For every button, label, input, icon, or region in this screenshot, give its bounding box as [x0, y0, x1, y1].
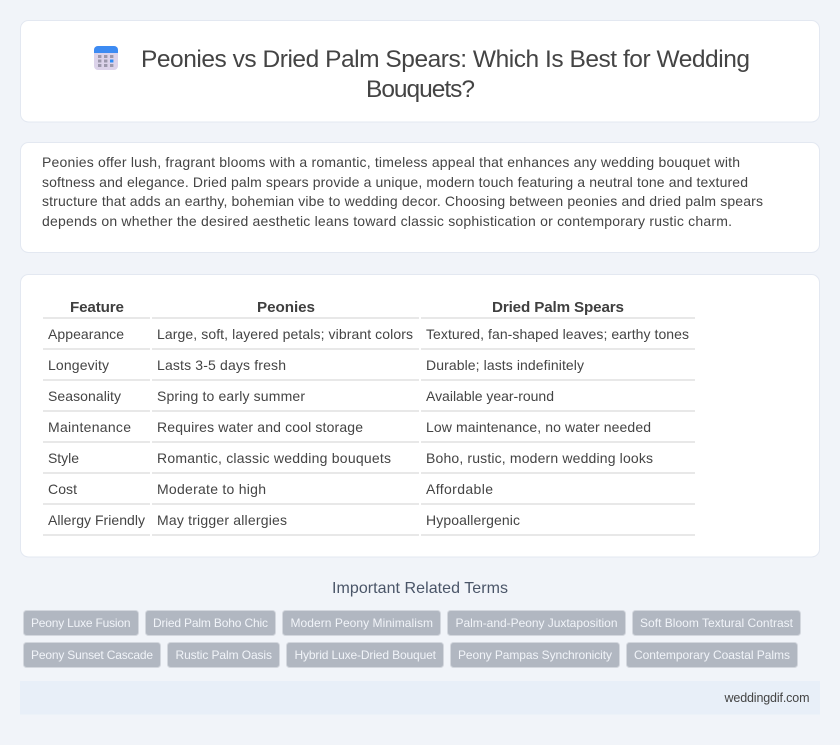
panel: title header [20, 20, 820, 122]
row: maintenance: Low maintenance, no water needed [426, 419, 651, 435]
row: style: Style [48, 450, 79, 466]
row: maintenance: Requires water and cool storage [157, 419, 363, 435]
row: appearance: Appearance [48, 326, 124, 342]
title: Peonies vs Dried Palm Spears: Which Is Best for Wedding [141, 46, 750, 73]
row: allergy friendly: Allergy Friendly [48, 512, 145, 528]
chip: Rustic Palm Oasis: Rustic Palm Oasis [176, 648, 272, 662]
row: allergy friendly: Hypoallergenic [426, 512, 520, 528]
chip: Modern Peony Minimalism: Modern Peony Minimalism [290, 616, 433, 630]
table header row [70, 299, 624, 316]
row: allergy friendly [48, 512, 520, 528]
chip: Soft Bloom Textural Contrast [632, 610, 800, 636]
chip: Peony Sunset Cascade: Peony Sunset Cascade [31, 648, 153, 662]
chip: Contemporary Coastal Palms: Contemporary Coastal Palms [634, 648, 790, 662]
chip: Modern Peony Minimalism [282, 610, 440, 636]
row: seasonality [48, 388, 554, 404]
intro paragraph: Peonies offer lush, fragrant blooms with a romantic, timeless appeal that enhances any wedding bouquet with [42, 154, 740, 170]
intro paragraph: softness and elegance. Dried palm spears provide a unique, modern touch featuring a neutral tone and textured [42, 174, 748, 190]
intro paragraph: structure that adds an earthy, bohemian vibe to wedding decor. Choosing between peonies and dried palm spears [42, 193, 763, 209]
chip: Palm-and-Peony Juxtaposition: Palm-and-Peony Juxtaposition [456, 616, 618, 630]
title: Bouquets? [366, 76, 475, 103]
intro paragraph: depends on whether the desired aesthetic leans toward classic sophistication or contemporary rustic charm. [42, 213, 732, 229]
chip: Peony Luxe Fusion [24, 610, 138, 636]
chip: Rustic Palm Oasis [168, 642, 280, 668]
row: cost [48, 481, 493, 497]
title [141, 46, 750, 103]
chip: Contemporary Coastal Palms [626, 642, 798, 668]
row: longevity [48, 357, 584, 373]
row: style: Boho, rustic, modern wedding looks [426, 450, 653, 466]
chip: Soft Bloom Textural Contrast: Soft Bloom Textural Contrast [640, 616, 794, 630]
row: appearance: Textured, fan-shaped leaves; earthy tones [426, 326, 689, 342]
row: longevity: Longevity [48, 357, 109, 373]
row: appearance: Large, soft, layered petals; vibrant colors [157, 326, 413, 342]
row: seasonality: Available year-round [426, 388, 554, 404]
row: style: Romantic, classic wedding bouquets [157, 450, 391, 466]
chip: Peony Luxe Fusion: Peony Luxe Fusion [31, 616, 130, 630]
icon: calendar [94, 46, 118, 70]
footer [20, 681, 820, 714]
row: maintenance: Maintenance [48, 419, 131, 435]
panel: comparison table [20, 274, 820, 557]
footer site name: weddingdif.com [724, 691, 810, 705]
row: cost: Cost [48, 481, 77, 497]
row: cost: Moderate to high [157, 481, 266, 497]
chip: Peony Pampas Synchronicity [450, 642, 620, 668]
related term chips [24, 610, 800, 668]
chip: Peony Pampas Synchronicity: Peony Pampas Synchronicity [458, 648, 612, 662]
intro paragraph [42, 154, 763, 229]
table header row: Peonies [257, 299, 315, 316]
row: maintenance [48, 419, 651, 435]
row: appearance [48, 326, 689, 342]
chip: Palm-and-Peony Juxtaposition [448, 610, 626, 636]
row: longevity: Durable; lasts indefinitely [426, 357, 584, 373]
row: style [48, 450, 653, 466]
chip: Dried Palm Boho Chic: Dried Palm Boho Chic [153, 616, 268, 630]
chip: Hybrid Luxe-Dried Bouquet [286, 642, 444, 668]
table header row: Feature [70, 299, 124, 316]
chip: Peony Sunset Cascade [24, 642, 160, 668]
panel: introduction text [20, 142, 820, 252]
row: longevity: Lasts 3-5 days fresh [157, 357, 286, 373]
row: seasonality: Spring to early summer [157, 388, 305, 404]
row: cost: Affordable [426, 481, 493, 497]
chip: Dried Palm Boho Chic [146, 610, 276, 636]
chip: Hybrid Luxe-Dried Bouquet: Hybrid Luxe-Dried Bouquet [294, 648, 437, 662]
table header row: Dried Palm Spears [492, 299, 624, 316]
row: allergy friendly: May trigger allergies [157, 512, 287, 528]
heading: important related terms: Important Related Terms [332, 580, 508, 597]
row: seasonality: Seasonality [48, 388, 121, 404]
